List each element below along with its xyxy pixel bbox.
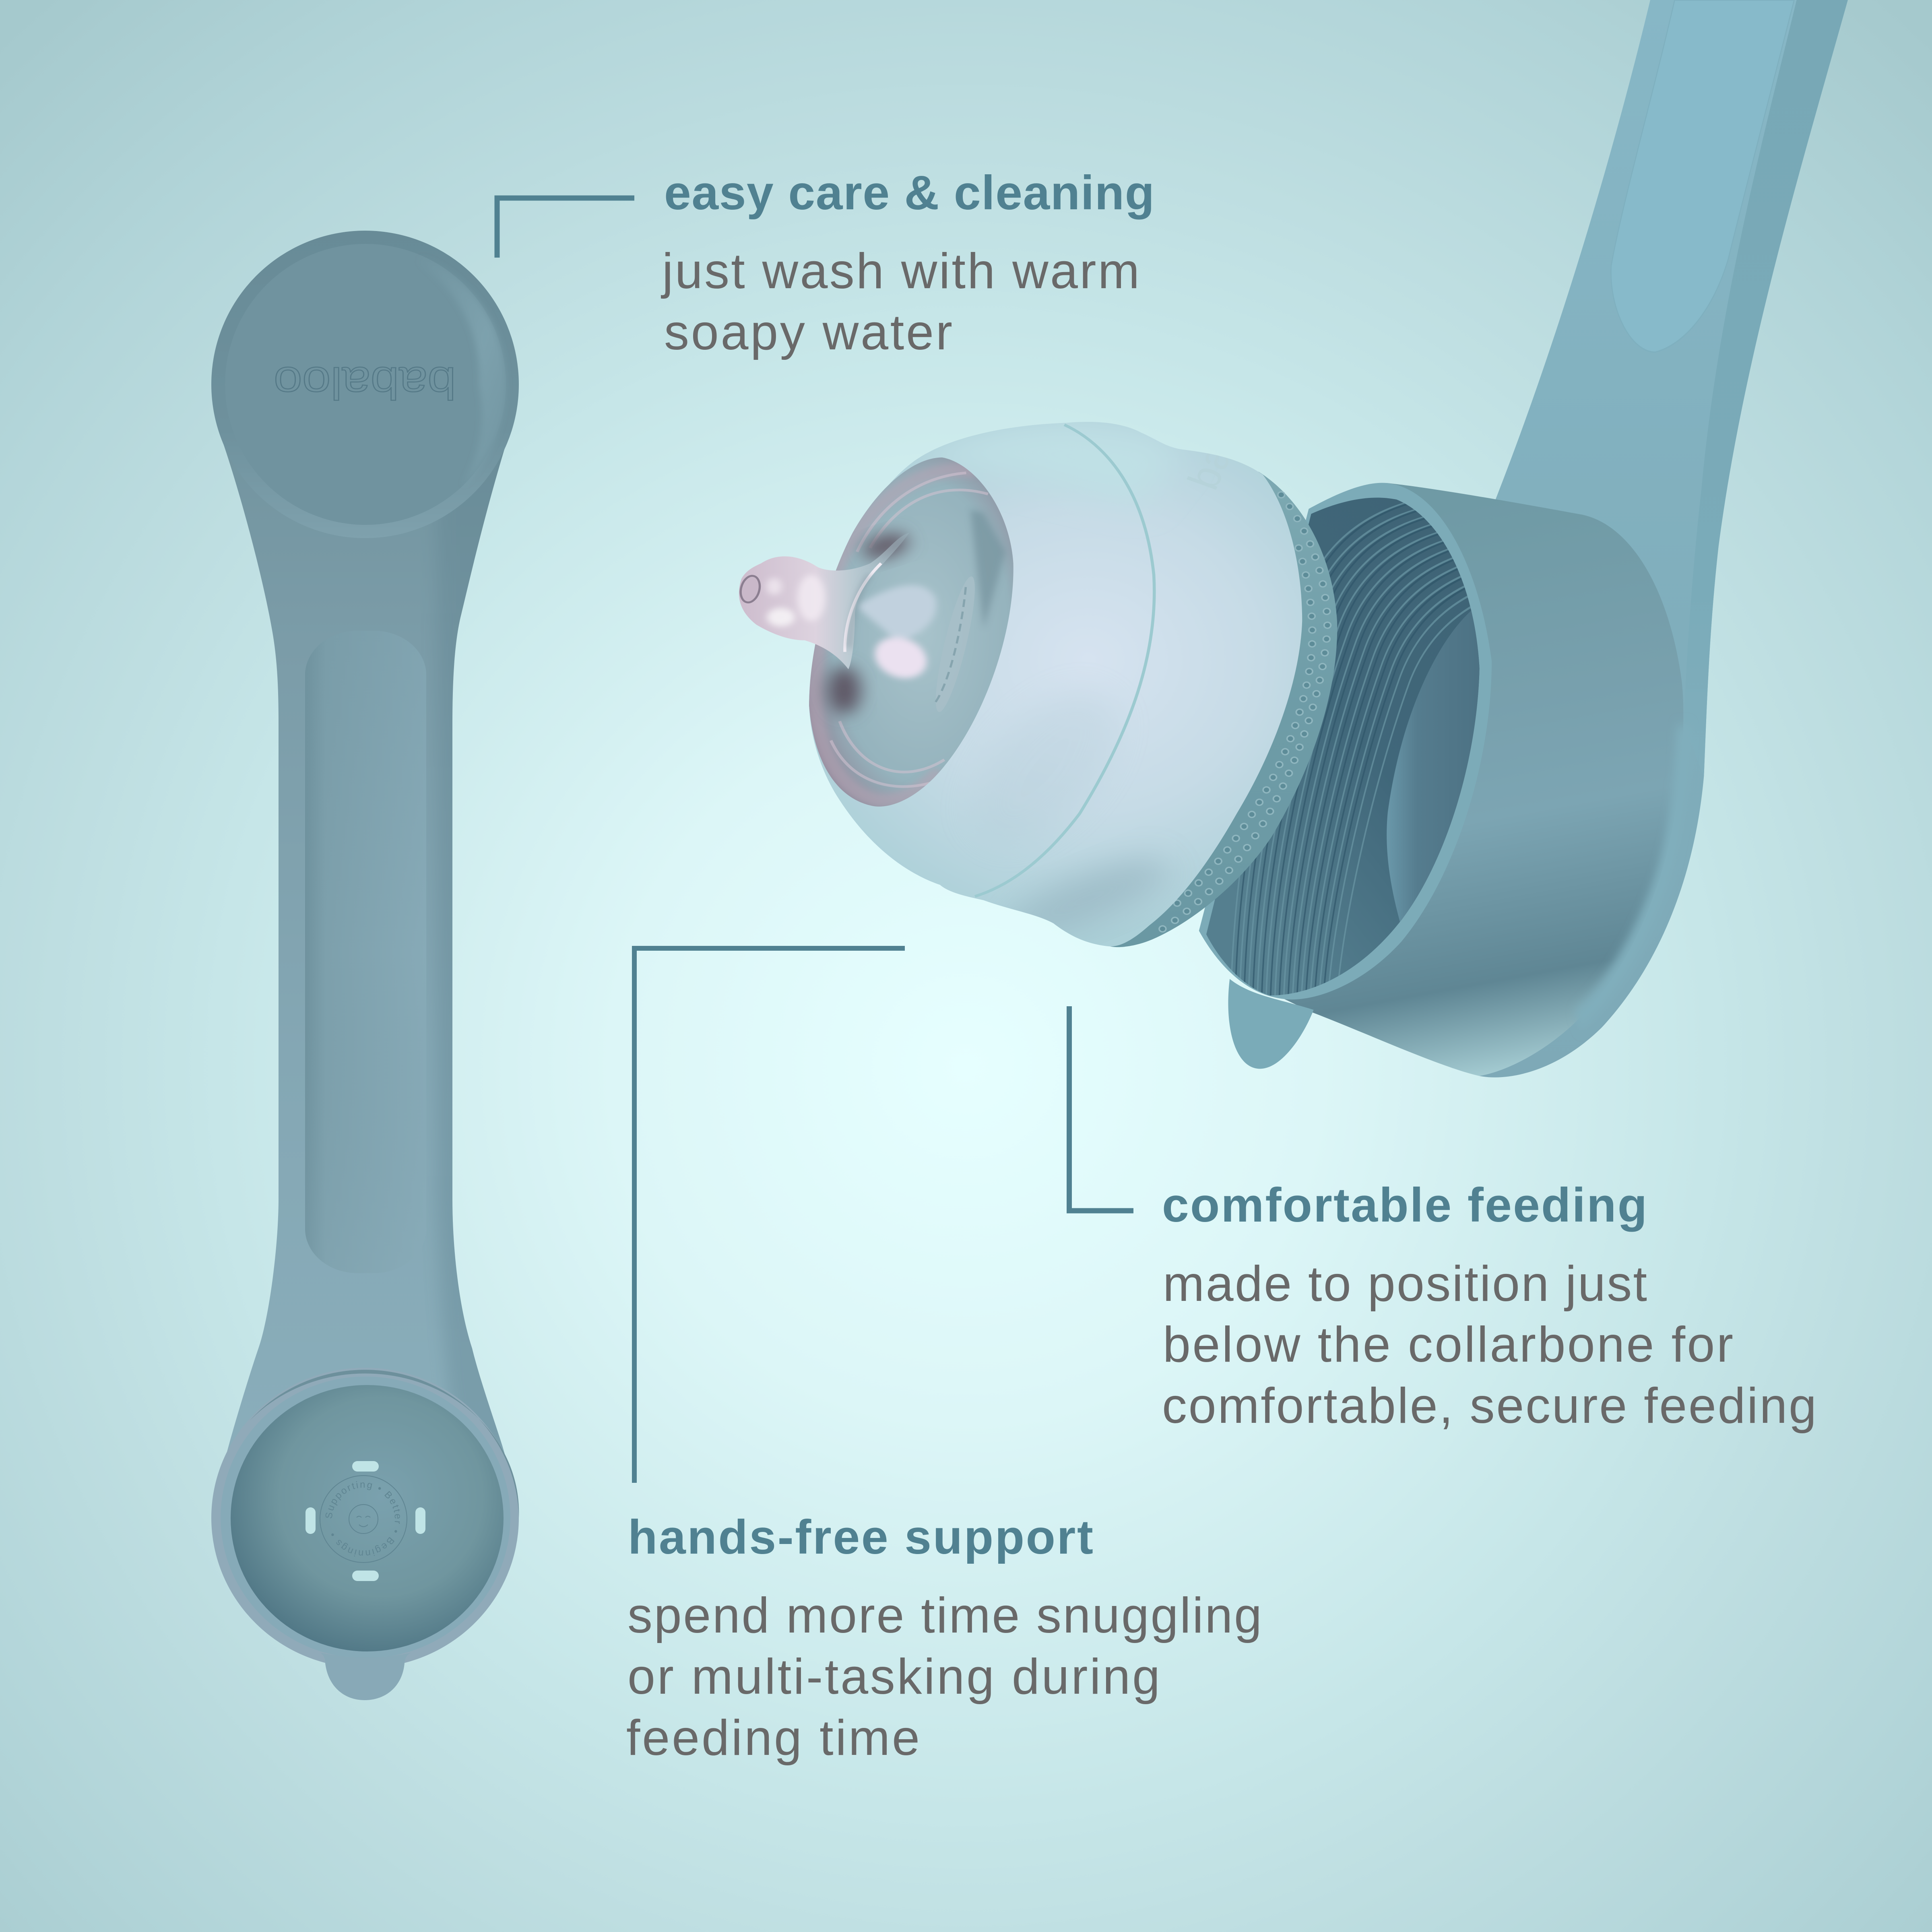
body text: feeding time bbox=[626, 1710, 920, 1766]
medallion text: Supporting • Better • Beginnings • bbox=[324, 1479, 403, 1559]
shell shading bbox=[914, 423, 1242, 952]
stem shine bbox=[845, 564, 881, 652]
cup wall bbox=[1284, 483, 1683, 1076]
body text: or multi-tasking during bbox=[627, 1649, 1160, 1705]
seam between shell halves bbox=[975, 425, 1154, 896]
body text bbox=[626, 1588, 1262, 1766]
inner ring bbox=[221, 1377, 510, 1658]
slot bottom bbox=[352, 1571, 379, 1581]
nipple tip bbox=[738, 574, 762, 604]
silicone shell bbox=[809, 422, 1302, 946]
cup interior bbox=[1206, 497, 1480, 995]
top cap with logo bbox=[211, 231, 519, 538]
dome rim lines bbox=[831, 473, 988, 786]
slot left bbox=[305, 1507, 316, 1534]
upper rim shadow bbox=[250, 1370, 519, 1518]
nipple highlights bbox=[767, 608, 795, 626]
strap viewed flat: left product bbox=[211, 231, 523, 1700]
cup floor bbox=[231, 1385, 504, 1651]
cup inner disc bbox=[1387, 604, 1489, 927]
cap outer rim bbox=[211, 231, 519, 538]
outer ring bbox=[211, 1368, 519, 1668]
leader line bbox=[497, 198, 634, 258]
cap highlight crescent bbox=[365, 244, 506, 485]
body text: made to position just bbox=[1163, 1256, 1647, 1312]
strap with cup viewed at an angle: right product bbox=[1199, 0, 1848, 1077]
bottle nipple and collar attached to the cup bbox=[738, 422, 1337, 952]
strap arm bbox=[1460, 0, 1848, 1077]
cup rim bbox=[1199, 483, 1492, 999]
dotted grip collar bbox=[1110, 472, 1337, 947]
cup tab bbox=[1228, 979, 1314, 1069]
strap right side shading bbox=[437, 450, 504, 1449]
heading: hands-free support bbox=[628, 1510, 1093, 1564]
embossed text on shell: ba bbox=[1178, 439, 1242, 495]
leader line bbox=[634, 948, 905, 1483]
strap body bbox=[219, 362, 508, 1530]
threads inside the cup bbox=[1231, 496, 1546, 1021]
engraved medallion bbox=[320, 1476, 407, 1563]
body text: spend more time snuggling bbox=[627, 1588, 1262, 1643]
recessed groove bbox=[305, 631, 426, 1273]
body text: comfortable, secure feeding bbox=[1162, 1378, 1816, 1434]
leader line bbox=[1069, 1006, 1133, 1211]
body text: just wash with warm bbox=[661, 244, 1139, 299]
dome rim band bbox=[815, 470, 975, 800]
strap edge band bbox=[1684, 0, 1848, 776]
strap groove bbox=[1611, 0, 1794, 352]
slot top bbox=[352, 1461, 379, 1472]
embossed logo text: babaloo bbox=[274, 358, 456, 408]
heading: comfortable feeding bbox=[1162, 1178, 1647, 1232]
body text bbox=[661, 244, 1139, 360]
body text: soapy water bbox=[664, 305, 952, 360]
bottom cup viewed from above bbox=[211, 1368, 519, 1700]
callout: hands-free support bbox=[626, 948, 1262, 1766]
callout: comfortable feeding bbox=[1069, 1006, 1816, 1434]
heading: easy care & cleaning bbox=[664, 166, 1154, 220]
body text bbox=[1162, 1256, 1816, 1434]
tab bbox=[320, 1653, 411, 1700]
body text: below the collarbone for bbox=[1163, 1317, 1733, 1373]
dome shadows bbox=[859, 528, 912, 564]
dome highlights bbox=[857, 585, 936, 644]
glass dome bbox=[809, 458, 1013, 807]
cap inner disc bbox=[225, 244, 506, 525]
callout: easy care and cleaning bbox=[497, 166, 1154, 360]
blend of wall into strap bbox=[1577, 726, 1683, 1021]
slot right bbox=[415, 1507, 425, 1534]
silicone nipple bbox=[738, 533, 910, 669]
